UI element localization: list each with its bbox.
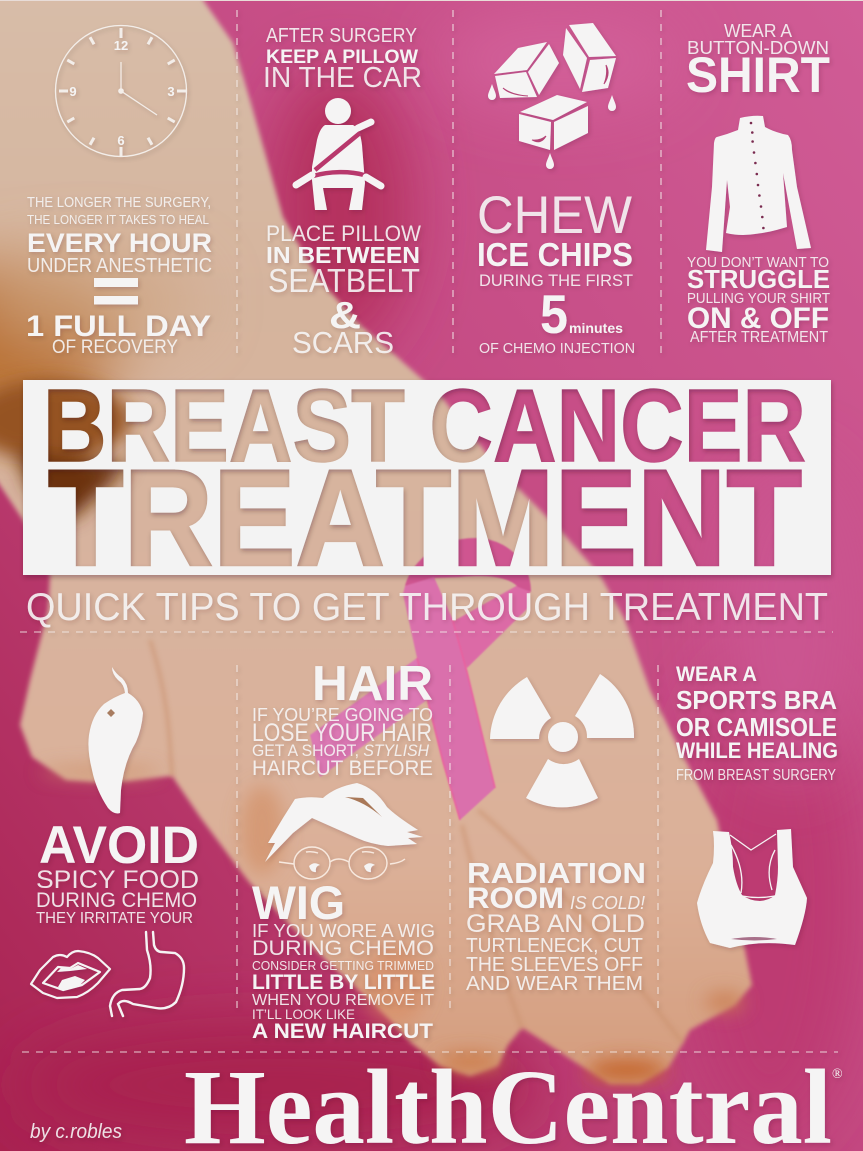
text: struggle on and off: ON & OFF — [687, 302, 829, 335]
text: radiation room is cold: AND WEAR THEM — [466, 973, 643, 995]
text: place pillow between seatbelt and scars: & — [329, 295, 361, 337]
ribbon — [310, 538, 531, 820]
panel: avoid spicy food — [31, 667, 199, 1016]
text: wig advice: DURING CHEMO — [252, 937, 434, 960]
panel: sports bra — [676, 663, 838, 948]
text: wig advice: WHEN YOU REMOVE IT — [252, 992, 434, 1009]
icon: radiation symbol — [490, 674, 634, 807]
icon: stomach — [110, 932, 184, 1016]
text: wig advice: CONSIDER GETTING TRIMMED — [252, 959, 434, 973]
text: chew ice chips: OF CHEMO INJECTION — [479, 340, 635, 357]
text: wig advice: WIG — [252, 876, 345, 929]
text: radiation room is cold: TURTLENECK, CUT — [466, 935, 643, 957]
text: place pillow between seatbelt and scars: SEATBELT — [268, 262, 420, 299]
title banner with cut-out letters — [23, 380, 831, 575]
text: radiation room is cold: GRAB AN OLD — [466, 910, 645, 938]
text: wear a button-down shirt — [686, 21, 830, 103]
text: place pillow between seatbelt and scars — [266, 221, 421, 360]
panel: button-down shirt — [686, 21, 830, 346]
text: every hour under anesthetic: THE LONGER IT TAKES TO HEAL — [27, 213, 209, 227]
text: wig advice — [252, 876, 435, 1043]
text: radiation room is cold: IS COLD! — [570, 893, 645, 913]
text: wear a sports bra — [676, 663, 838, 784]
HealthCentral logo: ® — [832, 1067, 843, 1082]
text: wig advice: IT’LL LOOK LIKE — [252, 1007, 355, 1022]
text: keep a pillow in the car: IN THE CAR — [263, 62, 422, 94]
icon: lips — [31, 951, 110, 998]
icon: melting ice cubes — [488, 23, 616, 169]
text: hair advice — [252, 657, 433, 780]
text: every hour under anesthetic: 1 FULL DAY — [26, 310, 211, 343]
text: hair advice: LOSE YOUR HAIR — [252, 719, 432, 747]
panel: surgery length — [26, 26, 212, 358]
text: struggle on and off: STRUGGLE — [687, 264, 830, 294]
icon: clock: 12 — [114, 38, 128, 53]
author credit: by c.robles — [30, 1121, 122, 1143]
text: wig advice: A NEW HAIRCUT — [252, 1020, 433, 1043]
text: struggle on and off — [687, 254, 830, 346]
text: wear a button-down shirt: SHIRT — [686, 47, 830, 103]
text: chew ice chips: ICE CHIPS — [477, 236, 633, 273]
text: avoid spicy food: DURING CHEMO — [36, 889, 197, 912]
icon: clock — [56, 26, 186, 156]
text: chew ice chips: DURING THE FIRST — [479, 271, 633, 290]
text: every hour under anesthetic: OF RECOVERY — [52, 337, 178, 358]
text: chew ice chips: 5 — [540, 283, 568, 345]
panel: hair and wig — [252, 657, 435, 1043]
text: struggle on and off: AFTER TREATMENT — [690, 329, 828, 346]
text: radiation room is cold: THE SLEEVES OFF — [466, 954, 643, 976]
text: wear a button-down shirt: BUTTON-DOWN — [687, 38, 829, 58]
text: place pillow between seatbelt and scars: SCARS — [292, 325, 394, 360]
icon: shirt — [706, 116, 811, 252]
text: place pillow between seatbelt and scars: PLACE PILLOW — [266, 221, 421, 246]
text: hair advice: IF YOU’RE GOING TO — [252, 705, 433, 725]
text: wear a button-down shirt: WEAR A — [724, 21, 792, 41]
text: every hour under anesthetic — [26, 194, 212, 358]
text: radiation room is cold: RADIATION — [467, 858, 646, 890]
text: chew ice chips: CHEW — [477, 186, 632, 245]
text: radiation room is cold: ROOM — [467, 882, 564, 915]
text: chew ice chips — [477, 186, 635, 357]
text: radiation room is cold — [466, 858, 646, 995]
text: struggle on and off: YOU DON’T WANT TO — [687, 254, 829, 271]
panel: radiation room — [466, 674, 646, 995]
text: keep a pillow in the car: AFTER SURGERY — [266, 25, 417, 47]
icon: person wearing seatbelt — [296, 98, 381, 210]
icon: clock: 3 — [167, 84, 175, 99]
text: wear a sports bra: OR CAMISOLE — [676, 712, 837, 742]
panel: chew ice chips — [477, 23, 635, 357]
text: avoid spicy food — [36, 816, 199, 927]
icon: clock: 9 — [69, 84, 77, 99]
text: wear a sports bra: SPORTS BRA — [676, 685, 837, 715]
text: wig advice: IF YOU WORE A WIG — [252, 921, 435, 941]
text: keep a pillow in the car — [263, 25, 422, 94]
text: chew ice chips: minutes — [569, 320, 623, 336]
icon: hair and glasses — [265, 783, 423, 879]
panel: pillow in the car — [263, 25, 422, 360]
text: hair advice: HAIRCUT BEFORE — [252, 757, 433, 780]
text: every hour under anesthetic: EVERY HOUR — [27, 228, 212, 258]
icon: sports bra — [697, 829, 807, 948]
text: hair advice: GET A SHORT, STYLISH — [252, 741, 430, 760]
icon: chili pepper — [88, 667, 143, 813]
text: wear a sports bra: WHILE HEALING — [676, 738, 838, 763]
icon: clock: 6 — [117, 133, 125, 148]
text: wig advice: LITTLE BY LITTLE — [252, 971, 435, 994]
text: struggle on and off: PULLING YOUR SHIRT — [687, 290, 830, 307]
text: avoid spicy food: THEY IRRITATE YOUR — [36, 910, 193, 927]
text: every hour under anesthetic: THE LONGER THE SURGERY, — [27, 194, 211, 211]
text: avoid spicy food: AVOID — [39, 816, 199, 875]
text: avoid spicy food: SPICY FOOD — [36, 866, 199, 894]
text: wear a sports bra: WEAR A — [676, 663, 757, 686]
quick tips subtitle: QUICK TIPS TO GET THROUGH TREATMENT — [26, 586, 828, 629]
text: keep a pillow in the car: KEEP A PILLOW — [266, 47, 418, 68]
text: hair advice: HAIR — [312, 657, 433, 711]
text: every hour under anesthetic: UNDER ANESTHETIC — [27, 255, 212, 277]
text: place pillow between seatbelt and scars: IN BETWEEN — [266, 242, 420, 268]
